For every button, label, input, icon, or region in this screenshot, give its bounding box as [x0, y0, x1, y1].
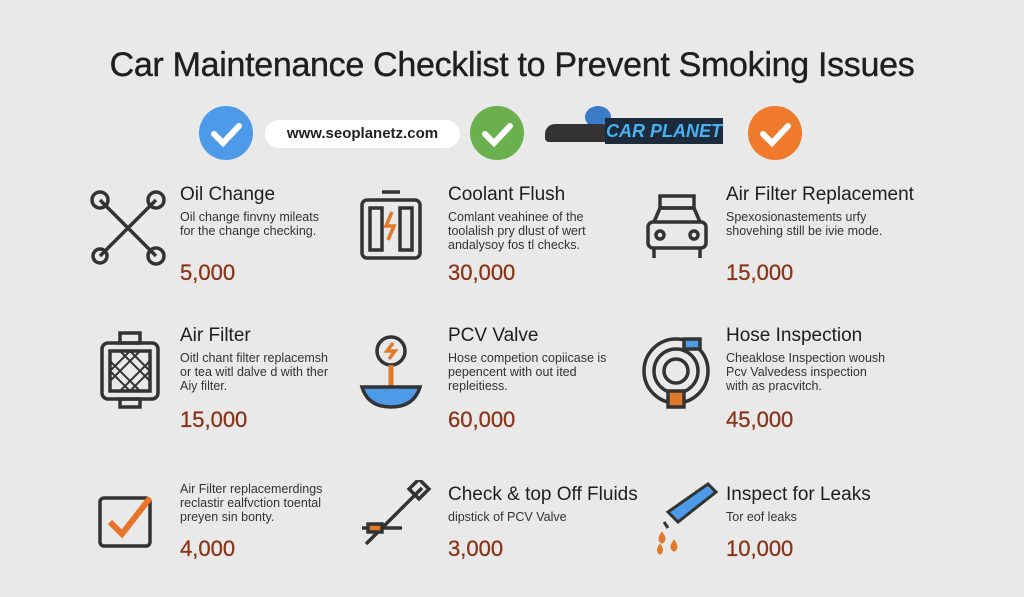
- item: inspect for leaks: 10,000: [726, 536, 793, 561]
- item: coolant flush: [360, 184, 586, 285]
- logo car planet: CAR PLANET: [606, 121, 722, 141]
- item: hose inspection: 45,000: [726, 407, 793, 432]
- item: coolant flush: 30,000: [448, 260, 515, 285]
- check icon blue: [199, 106, 253, 160]
- item: hose inspection: Cheaklose Inspection woush: [726, 351, 885, 365]
- website badge: www.seoplanetz.com: [287, 125, 438, 142]
- check icon orange: [748, 106, 802, 160]
- item: air filter: [100, 325, 328, 432]
- item: pcv valve: repleitiess.: [448, 379, 508, 393]
- title: Car Maintenance Checklist to Prevent Smoking Issues: [110, 46, 914, 84]
- item: oil change: 5,000: [180, 260, 235, 285]
- item: coolant flush: toolalish pry dlust of wert: [448, 224, 586, 238]
- icon: oil can drip: [656, 482, 718, 555]
- item: coolant flush: andalysoy fos tl checks.: [448, 238, 580, 252]
- website badge: [265, 120, 460, 148]
- item: pcv valve: Hose competion copiicase is: [448, 351, 606, 365]
- icon: hose coil: [642, 337, 710, 409]
- item: hose inspection: Pcv Valvedess inspection: [726, 365, 867, 379]
- item: check fluids: [362, 480, 638, 561]
- check icon green: [470, 106, 524, 160]
- item: checkbox: reclastir ealfvction toental: [180, 496, 321, 510]
- item: oil change: Oil Change: [180, 184, 275, 205]
- item: air filter replacement: shovehing still be ivie mode.: [726, 224, 882, 238]
- item: check fluids: dipstick of PCV Valve: [448, 510, 567, 524]
- icon: radiator: [360, 190, 422, 260]
- item: inspect for leaks: [656, 482, 871, 561]
- item: checkbox: 4,000: [180, 536, 235, 561]
- icon: dipstick: [362, 480, 432, 546]
- icon: bulb valve: [360, 335, 422, 409]
- item: pcv valve: 60,000: [448, 407, 515, 432]
- item: checkbox: preyen sin bonty.: [180, 510, 274, 524]
- item: air filter: Air Filter: [180, 325, 251, 346]
- item: air filter replacement: [646, 184, 914, 285]
- item: air filter: Oitl chant filter replacemsh: [180, 351, 328, 365]
- logo car planet: [545, 106, 724, 144]
- item: hose inspection: Hose Inspection: [726, 325, 862, 346]
- item: check fluids: Check & top Off Fluids: [448, 484, 638, 505]
- item: hose inspection: with as pracvitch.: [726, 379, 822, 393]
- item: inspect for leaks: Inspect for Leaks: [726, 484, 871, 505]
- item: oil change: Oil change finvny mileats: [180, 210, 319, 224]
- icon: filter grid: [100, 331, 160, 409]
- item: air filter replacement: Spexosionastements urfy: [726, 210, 866, 224]
- item: pcv valve: [360, 325, 606, 432]
- item: pcv valve: PCV Valve: [448, 325, 538, 346]
- icon: car: [646, 194, 708, 258]
- item: air filter: Aiy filter.: [180, 379, 227, 393]
- item: inspect for leaks: Tor eof leaks: [726, 510, 797, 524]
- icon: wrenches: [90, 190, 166, 266]
- item: oil change: for the change checking.: [180, 224, 316, 238]
- item: check fluids: 3,000: [448, 536, 503, 561]
- item: air filter replacement: 15,000: [726, 260, 793, 285]
- item: coolant flush: Comlant veahinee of the: [448, 210, 584, 224]
- item: air filter: 15,000: [180, 407, 247, 432]
- item: air filter replacement: Air Filter Replacement: [726, 184, 914, 205]
- item: coolant flush: Coolant Flush: [448, 184, 565, 205]
- item: checkbox: [98, 482, 322, 561]
- icon: checkbox: [98, 496, 152, 548]
- item: oil change: [90, 184, 319, 285]
- item: checkbox: Air Filter replacemerdings: [180, 482, 322, 496]
- item: hose inspection: [642, 325, 885, 432]
- item: pcv valve: pepencent with out ited: [448, 365, 577, 379]
- item: air filter: or tea witl dalve d with ther: [180, 365, 328, 379]
